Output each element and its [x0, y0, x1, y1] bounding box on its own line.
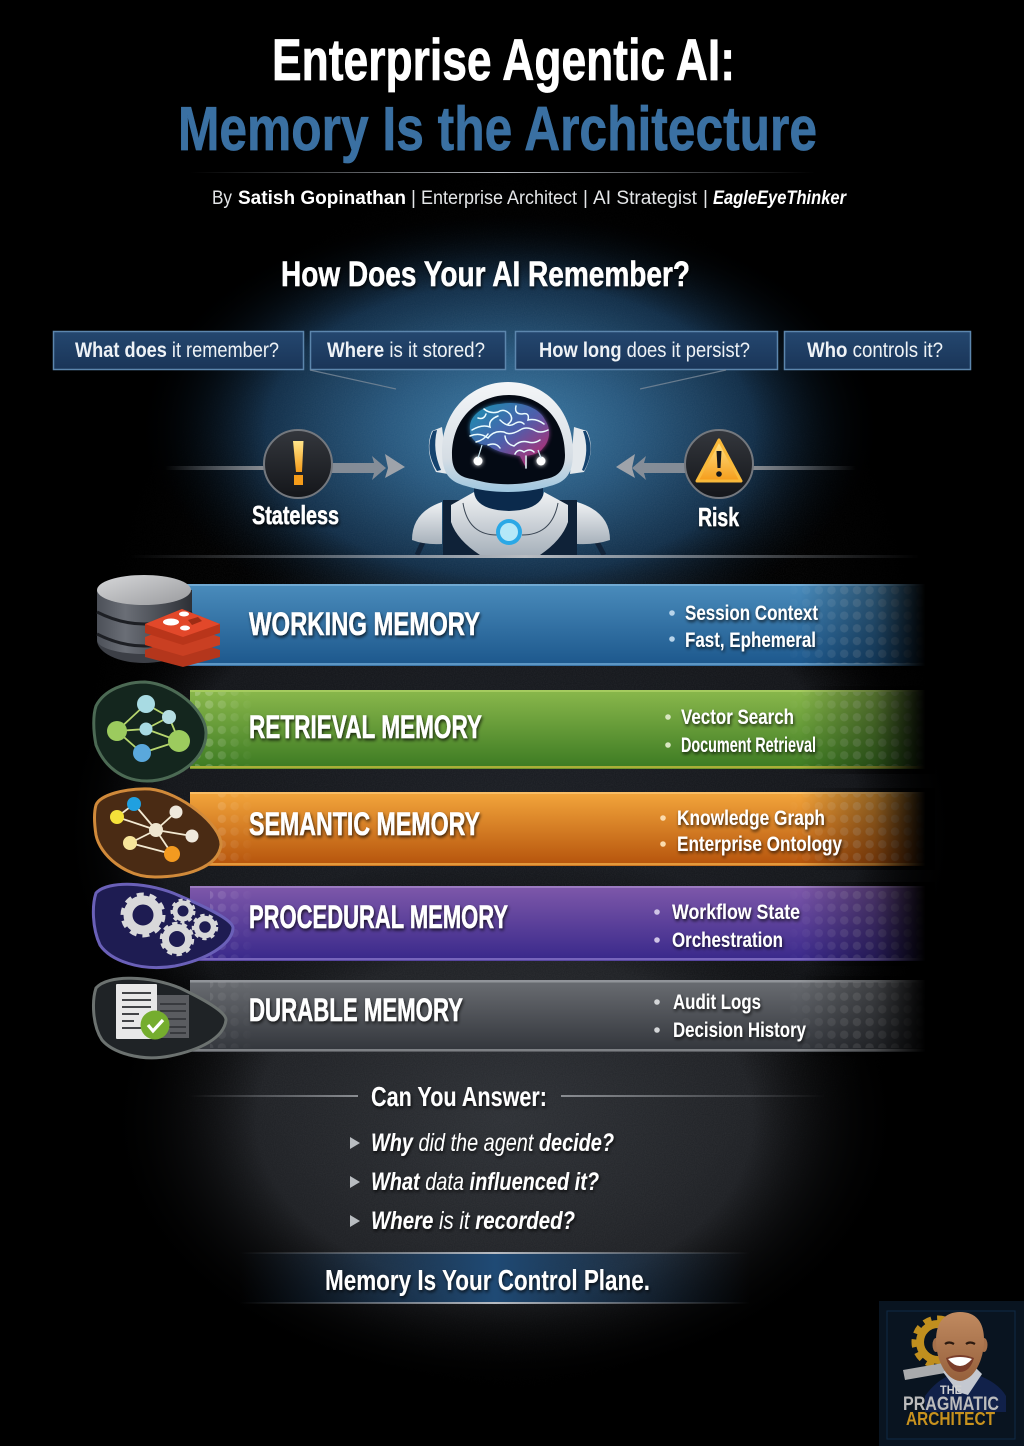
bullets: Workflow State: [672, 901, 800, 924]
band: durable memory: [94, 976, 935, 1058]
byline: By: [212, 188, 232, 209]
bullets: Enterprise Ontology: [677, 833, 842, 856]
heading: how does your AI remember: How Does Your AI Remember?: [281, 255, 690, 294]
label: WORKING MEMORY: [249, 606, 480, 642]
band: retrieval memory: [94, 682, 935, 781]
byline: Satish Gopinathan: [238, 188, 406, 209]
bullets: [654, 991, 806, 1042]
icon: documents with check: [94, 978, 226, 1058]
bullets: Audit Logs: [673, 991, 761, 1014]
bullets: [669, 602, 818, 652]
label: RETRIEVAL MEMORY: [249, 709, 482, 745]
bullets: Document Retrieval: [681, 734, 816, 757]
box: how long: How long does it persist?: [539, 339, 750, 362]
bullets: [654, 901, 800, 952]
question list: What data influenced it?: [371, 1168, 599, 1196]
byline: |: [583, 188, 588, 209]
brain icon: [470, 403, 549, 468]
logo: the pragmatic architect: THE: [940, 1383, 962, 1397]
banner: control plane: [240, 1252, 750, 1304]
band: procedural memory: [93, 882, 935, 968]
label: PROCEDURAL MEMORY: [249, 899, 508, 935]
robot helmet: [442, 382, 573, 492]
byline: |: [703, 188, 708, 209]
box: how long: [516, 332, 778, 370]
logo: the pragmatic architect: ARCHITECT: [906, 1409, 995, 1429]
bullets: Fast, Ephemeral: [685, 629, 816, 652]
robot ears: [429, 427, 591, 474]
bullets: Knowledge Graph: [677, 807, 825, 830]
byline: [212, 188, 847, 209]
background glow: [114, 228, 906, 1350]
box: where: [310, 332, 506, 370]
label: DURABLE MEMORY: [249, 992, 463, 1028]
question list: [350, 1129, 614, 1235]
box: what: What does it remember?: [75, 339, 279, 362]
byline: |: [411, 188, 416, 209]
question boxes: [54, 332, 970, 370]
title: Memory Is the Architecture: [178, 95, 817, 164]
leader lines: [310, 370, 726, 389]
box: what: [54, 332, 304, 370]
risk indicator: Risk: [698, 502, 739, 532]
byline: Enterprise Architect: [421, 188, 578, 209]
robot visor: [452, 395, 565, 484]
box: who: Who controls it?: [807, 339, 943, 362]
byline: AI Strategist: [593, 188, 698, 209]
box: where: Where is it stored?: [327, 339, 485, 362]
label: SEMANTIC MEMORY: [249, 806, 480, 842]
bullets: Orchestration: [672, 929, 783, 952]
byline: EagleEyeThinker: [713, 188, 847, 209]
robot body: [412, 485, 610, 555]
logo: the pragmatic architect: [879, 1301, 1024, 1446]
icon: gears: [93, 884, 233, 968]
question list: Why did the agent decide?: [371, 1129, 614, 1157]
risk indicator: [616, 430, 856, 532]
stateless indicator: [165, 430, 405, 530]
banner: control plane: Memory Is Your Control Plane.: [325, 1265, 650, 1297]
icon: database with red stack: [97, 575, 220, 667]
bullets: [665, 706, 816, 757]
bullets: [660, 807, 842, 856]
icon: retrieval network: [94, 682, 206, 781]
bullets: Decision History: [673, 1019, 806, 1042]
band: working memory: [97, 575, 935, 670]
box: who: [784, 332, 970, 370]
heading: can you answer: Can You Answer:: [371, 1081, 547, 1112]
logo: the pragmatic architect: PRAGMATIC: [903, 1394, 999, 1415]
stateless indicator: Stateless: [252, 500, 339, 530]
robot: [412, 382, 610, 555]
band: semantic memory: [94, 788, 935, 877]
title: Enterprise Agentic AI:: [272, 28, 735, 93]
bullets: Session Context: [685, 602, 818, 625]
question list: Where is it recorded?: [371, 1207, 575, 1235]
bullets: Vector Search: [681, 706, 794, 729]
title: [178, 28, 817, 164]
icon: semantic graph: [94, 789, 221, 877]
